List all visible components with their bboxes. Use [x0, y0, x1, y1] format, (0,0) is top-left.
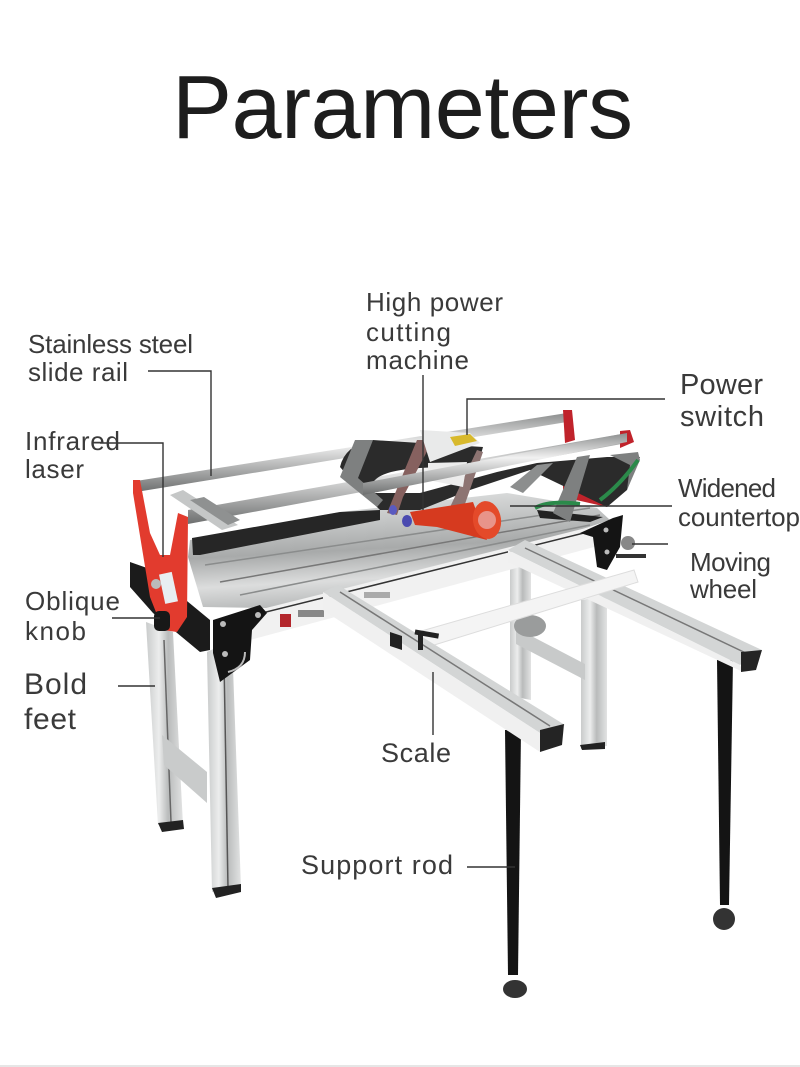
black chain carrier	[340, 430, 640, 527]
label: oblique knob: knob	[25, 616, 86, 646]
label: moving wheel	[689, 547, 771, 604]
front left legs	[146, 622, 241, 898]
label: stainless steel slide rail: Stainless steel	[28, 329, 193, 359]
label: high power cutting machine	[366, 287, 503, 375]
label: scale: Scale	[381, 738, 451, 768]
label: power switch	[680, 369, 764, 433]
label: bold feet: feet	[24, 703, 77, 736]
label: oblique knob: Oblique	[25, 586, 120, 616]
logo on front face	[280, 592, 390, 627]
label: widened countertop	[678, 473, 800, 532]
label: moving wheel: wheel	[689, 574, 757, 604]
right bracket	[580, 515, 646, 570]
title: Parameters	[172, 58, 633, 158]
slide rails	[136, 413, 627, 530]
leader lines	[100, 371, 672, 867]
label: stainless steel slide rail	[28, 329, 193, 387]
green cable	[535, 460, 638, 508]
bottom edge band	[0, 1065, 800, 1067]
label: infrared laser: Infrared	[25, 426, 120, 456]
back legs	[510, 565, 607, 750]
machine illustration	[130, 410, 762, 998]
cross bar	[404, 570, 638, 650]
label: widened countertop: Widened	[678, 473, 776, 503]
label: high power cutting machine: High power	[366, 287, 503, 317]
red motor	[389, 499, 504, 541]
label: high power cutting machine: machine	[366, 345, 469, 375]
label: support rod: Support rod	[301, 850, 453, 880]
black support rods	[503, 660, 735, 998]
label: high power cutting machine: cutting	[366, 317, 451, 347]
label: power switch: switch	[680, 401, 764, 433]
label: bold feet: Bold	[24, 668, 87, 701]
black corner bracket	[213, 605, 267, 682]
label: oblique knob	[25, 586, 120, 646]
label: infrared laser	[25, 426, 120, 484]
oblique knob	[154, 611, 170, 631]
right sliding arm	[508, 540, 762, 672]
label: bold feet	[24, 668, 87, 736]
red left plate	[133, 480, 188, 632]
left black side plate	[130, 562, 210, 652]
label: infrared laser: laser	[25, 454, 84, 484]
label: power switch: Power	[680, 369, 763, 401]
right end plates	[563, 410, 634, 507]
label: moving wheel: Moving	[690, 547, 771, 577]
table top	[188, 493, 620, 640]
left sliding arm	[323, 585, 565, 752]
label: widened countertop: countertop	[678, 502, 800, 532]
label: stainless steel slide rail: slide rail	[28, 357, 128, 387]
